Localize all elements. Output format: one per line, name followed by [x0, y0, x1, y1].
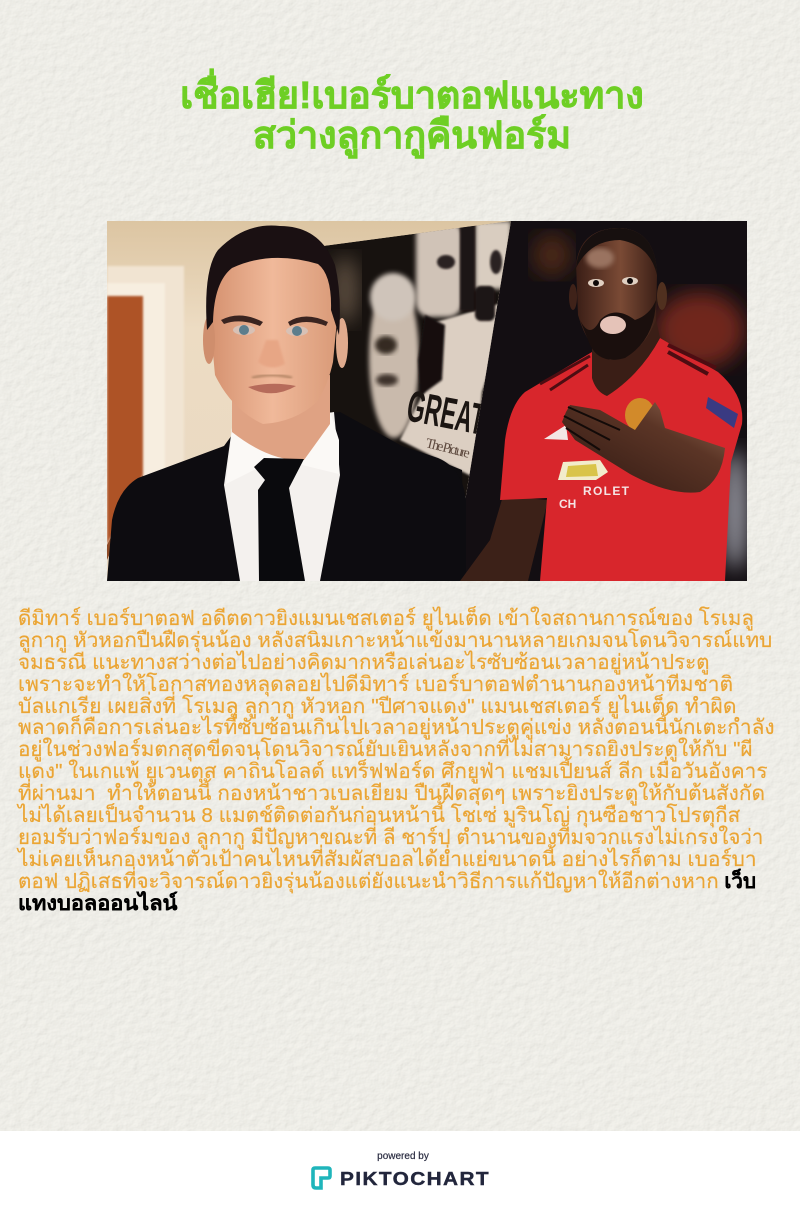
article body text: แทงบอลออนไลน์	[18, 892, 177, 915]
article body text: ไม่เคยเห็นกองหน้าตัวเป้าคนไหนที่สัมผัสบอลได้ย่ำแย่ขนาดนี้ อย่างไรก็ตาม เบอร์บา	[18, 848, 757, 871]
Lukaku: ROLET	[583, 484, 630, 498]
poster	[324, 221, 511, 498]
article body text: ยอมรับว่าฟอร์มของ ลูกากู มีปัญหาขณะที่ ลี ชาร์ป ตำนานของทีมจวกแรงไม่เกรงใจว่า	[18, 826, 763, 849]
article body text: แดง" ในเกแพ้ ยูเวนตุส คาถิ่นโอลด์ แทร็ฟฟอร์ด ศึกยูฟ่า แชมเปี้ยนส์ ลีก เมื่อวันอังคาร	[18, 760, 768, 783]
title: สว่างลูกากูคืนฟอร์ม	[253, 114, 571, 156]
middle man	[416, 221, 462, 317]
article body text: พลาดก็คือการเล่นอะไรที่ซับซ้อนเกินไปเวลาอยู่หน้าประตูคู่แข่ง หลังตอนนี้นักเตะกำลัง	[18, 716, 775, 739]
icon: Piktochart logo mark	[313, 1168, 330, 1188]
article body text: ดีมิทาร์ เบอร์บาตอฟ อดีตดาวยิงแมนเชสเตอร์ ยูไนเต็ด เข้าใจสถานการณ์ของ โรเมลู	[18, 607, 754, 630]
beard	[580, 300, 656, 360]
article body text: ไม่ได้เลยเป็นจำนวน 8 แมตช์ติดต่อกันก่อนหน้านี้ โชเซ่ มูรินโญ่ กุนซือชาวโปรตุกีส	[18, 804, 740, 827]
right dark background	[452, 221, 749, 581]
article body text: จมธรณี แนะทางสว่างต่อไปอย่างคิดมากหรือเล่นอะไรซับซ้อนเวลาอยู่หน้าประตู	[18, 651, 710, 674]
poster: The Picture	[424, 436, 471, 462]
article body text: ที่ผ่านมา ทำให้ตอนนี้ กองหน้าชาวเบลเยียม ปืนฝืดสุดๆ เพราะยิงประตูให้กับต้นสังกัด	[18, 782, 765, 805]
neck	[592, 315, 660, 396]
Berbatov	[107, 226, 466, 581]
article body text: เพราะจะทำให้โอกาสทองหลุดลอยไปดีมิทาร์ เบอร์บาตอฟตำนานกองหน้าทีมชาติ	[18, 673, 733, 696]
title: เชื่อเฮีย!เบอร์บาตอฟแนะทาง	[180, 74, 644, 116]
article body text: ลูกากู หัวหอกปืนฝืดรุ่นน้อง หลังสนิมเกาะหน้าแข้งมานานหลายเกมจนโดนวิจารณ์แทบ	[18, 629, 772, 652]
head	[576, 228, 657, 360]
article body text: ตอฟ ปฏิเสธที่จะวิจารณ์ดาวยิงรุ่นน้องแต่ยังแนะนำวิธีการแก้ปัญหาให้อีกต่างหาก เว็บ	[18, 870, 756, 893]
article body text	[16, 606, 775, 915]
wall and door	[107, 221, 511, 581]
sweater and paper	[398, 302, 498, 477]
Lukaku	[460, 228, 742, 581]
wordmark: PIKTOCHART	[340, 1169, 490, 1189]
tie	[254, 458, 305, 581]
hair	[206, 226, 340, 335]
face	[208, 254, 337, 424]
jersey	[500, 338, 742, 581]
title	[180, 68, 644, 159]
front old man	[369, 278, 419, 438]
eyes and mouth	[588, 279, 604, 287]
right arm and hand	[562, 402, 725, 493]
footer: powered by Piktochart	[0, 1131, 800, 1211]
shirt	[224, 412, 340, 581]
suit	[107, 412, 466, 581]
powered by label: powered by	[377, 1151, 429, 1162]
article body text: อยู่ในช่วงฟอร์มตกสุดขีดจนโดนวิจารณ์ยับเยินหลังจากที่ไม่สามารถยิงประตูให้กับ "ผี	[18, 738, 753, 761]
sponsor and logos	[544, 425, 568, 440]
poster: GREAT	[403, 382, 489, 445]
lower left arm	[460, 496, 548, 581]
stripes	[668, 345, 716, 374]
right man	[475, 221, 511, 289]
photo: Berbatov and Lukaku	[107, 221, 747, 581]
nose shadow and mouth	[258, 340, 285, 368]
neck	[232, 375, 330, 460]
eyes and brows	[221, 315, 263, 326]
article body text: บัลแกเรีย เผยสิ่งที่ โรเมลู ลูกากู หัวหอก "ปีศาจแดง" แมนเชสเตอร์ ยูไนเต็ด ทำผิด	[18, 695, 737, 718]
Lukaku: CH	[559, 497, 576, 511]
